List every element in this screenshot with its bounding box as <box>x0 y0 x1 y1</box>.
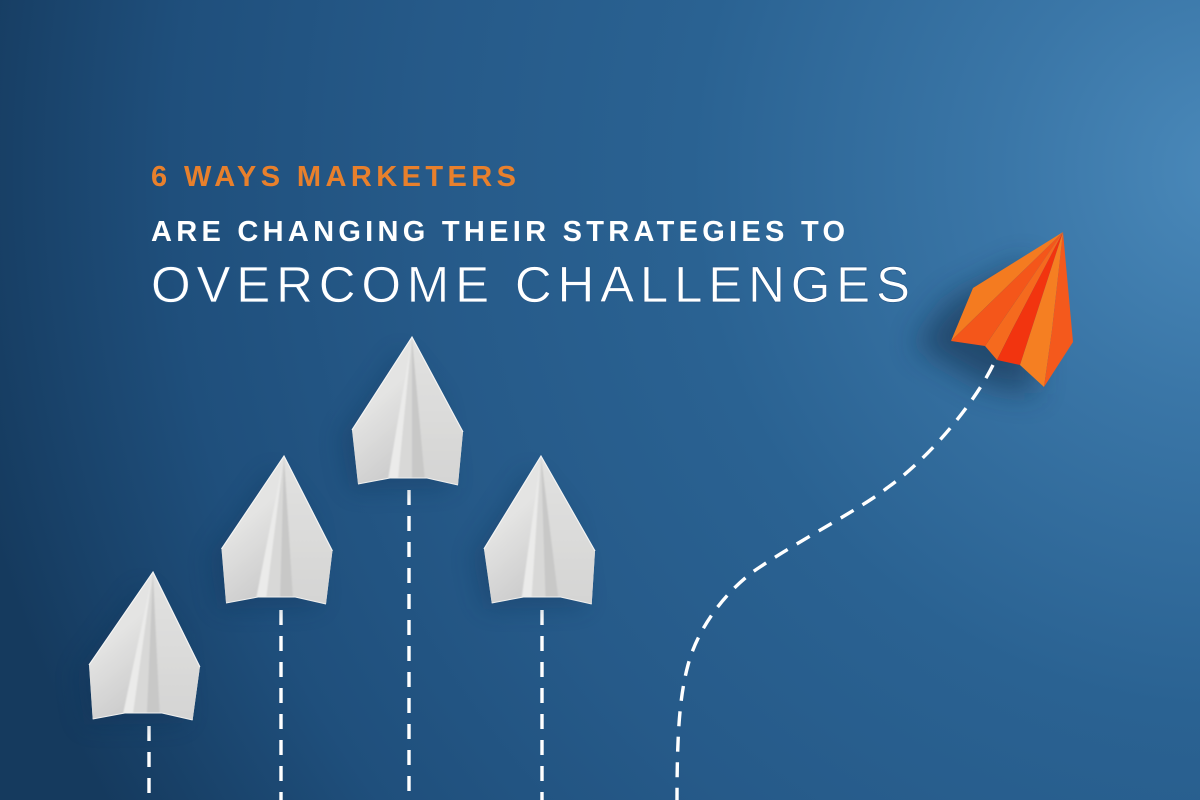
flight path: white plane 4 <box>540 610 544 800</box>
flight path: white plane 2 <box>279 610 283 800</box>
curved dashed flight path <box>677 365 993 800</box>
white paper plane 2 <box>208 456 342 609</box>
title <box>151 161 910 313</box>
heading line 3: large white: OVERCOME CHALLENGES <box>151 256 910 313</box>
white paper plane 1 <box>74 572 211 725</box>
orange paper plane <box>915 232 1073 395</box>
flight path: white plane 3 <box>407 490 411 800</box>
heading line 1: orange: 6 WAYS MARKETERS <box>151 161 516 193</box>
flight path: white plane 1 <box>147 726 151 800</box>
white paper plane 4 <box>469 456 604 609</box>
white paper plane 3 <box>340 337 470 490</box>
heading line 2: white: ARE CHANGING THEIR STRATEGIES TO <box>151 216 845 248</box>
